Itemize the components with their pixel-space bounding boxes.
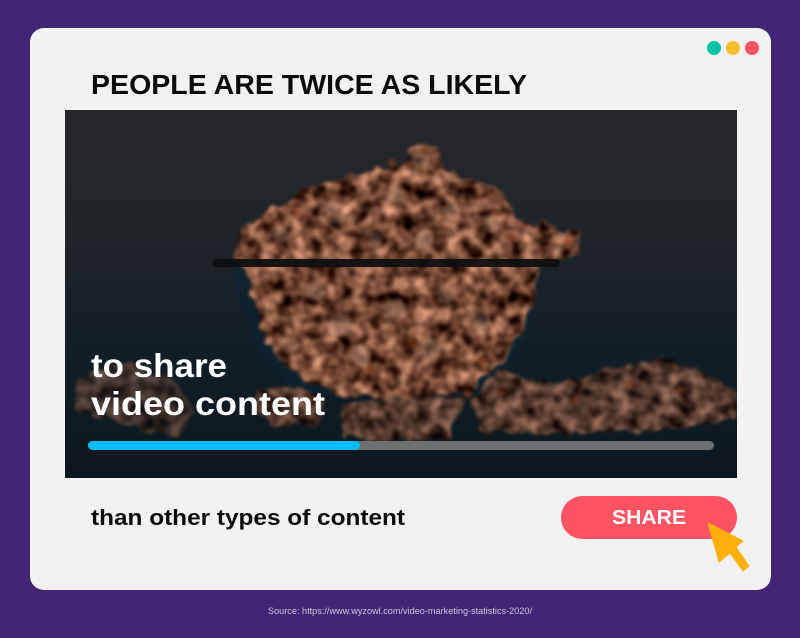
share button xyxy=(561,496,737,539)
progress bar xyxy=(88,441,714,450)
left scattered popcorn xyxy=(75,360,195,436)
bowl glass xyxy=(232,266,542,395)
popcorn kernels xyxy=(293,159,684,404)
popcorn in bowl xyxy=(234,144,580,398)
video panel: popcorn photo xyxy=(65,110,737,478)
photo text xyxy=(91,353,325,416)
icon: cursor arrow xyxy=(708,523,749,571)
source: Source: https://www.wyzowl.com/video-marketing-statistics-2020/ xyxy=(268,606,532,617)
bowl rim xyxy=(216,259,556,267)
window control dots xyxy=(707,41,759,55)
scattered popcorn xyxy=(255,356,737,442)
caption: than other types of content xyxy=(91,505,406,530)
popcorn highlights xyxy=(272,152,498,365)
heading: PEOPLE ARE TWICE AS LIKELY xyxy=(91,69,527,100)
photo text: video content xyxy=(91,385,325,422)
photo text: to share xyxy=(91,347,227,384)
share button: SHARE xyxy=(612,507,686,529)
